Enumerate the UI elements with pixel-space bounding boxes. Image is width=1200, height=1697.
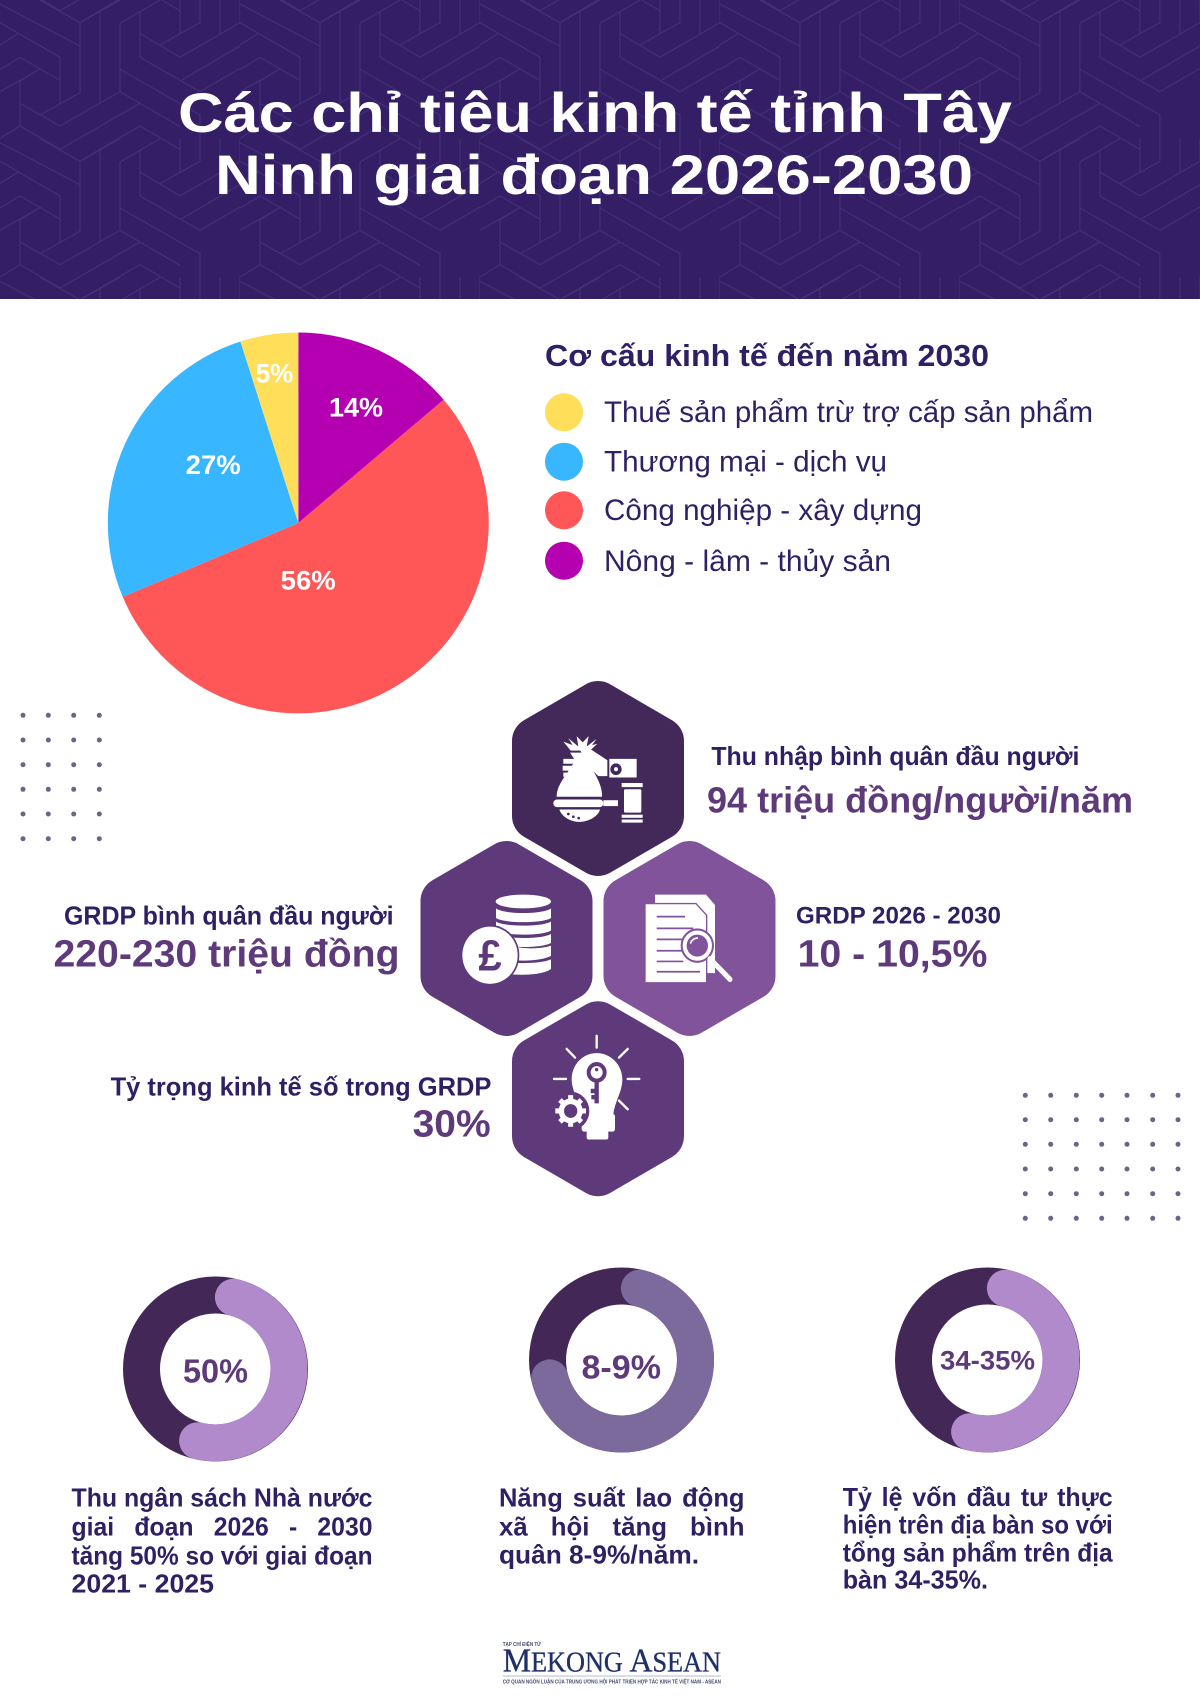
metric: GRDP growth: GRDP 2026 - 2030	[796, 902, 1001, 929]
logo: Mekong Asean: TẠP CHÍ ĐIỆN TỬ	[503, 1640, 542, 1648]
metric: GRDP per capita: GRDP bình quân đầu người	[64, 900, 394, 930]
text block: budget revenue: giai đoạn 2026 - 2030	[72, 1512, 372, 1542]
text block: budget revenue	[72, 1482, 372, 1599]
slice: industry 56%	[123, 400, 489, 713]
slice: agriculture 14%	[298, 332, 444, 523]
text block: budget revenue: tăng 50% so với giai đoạn	[72, 1540, 372, 1570]
legend items: Nông - lâm - thủy sản	[604, 545, 891, 578]
donut: 8-9% labor productivity	[548, 1286, 696, 1434]
title	[178, 81, 1012, 206]
title: Các chỉ tiêu kinh tế tỉnh Tây	[178, 81, 1012, 144]
decorative dots right	[1023, 1093, 1180, 1221]
metric: GRDP per capita	[54, 900, 400, 976]
metric: digital economy share: Tỷ trọng kinh tế số trong GRDP	[111, 1072, 491, 1102]
text block: investment ratio: hiện trên địa bàn so với	[843, 1509, 1113, 1539]
icon: money bag and gavel	[553, 736, 643, 823]
legend items: Thuế sản phẩm trừ trợ cấp sản phẩm	[604, 396, 1093, 429]
pie chart: economic structure	[108, 332, 489, 713]
metric: GRDP growth	[796, 902, 1001, 976]
text block: budget revenue: 2021 - 2025	[72, 1569, 214, 1599]
pie value labels: 27%	[186, 450, 241, 480]
text block: investment ratio: Tỷ lệ vốn đầu tư thực	[843, 1482, 1113, 1512]
text block: labor productivity: xã hội tăng bình	[499, 1512, 744, 1542]
slice: product tax 5%	[240, 332, 298, 523]
text block: investment ratio: tổng sản phẩm trên địa	[843, 1538, 1113, 1568]
text block: investment ratio	[843, 1482, 1113, 1594]
text block: labor productivity: Năng suất lao động	[499, 1482, 744, 1512]
hexagon: income per capita	[536, 705, 660, 852]
hexagon: GRDP 2026-2030	[628, 865, 752, 1012]
title: Ninh giai đoạn 2026-2030	[215, 143, 973, 206]
decorative dots left	[20, 713, 102, 841]
hexagon: digital economy share	[536, 1025, 660, 1172]
logo: Mekong Asean: CƠ QUAN NGÔN LUẬN CỦA TRUNG ƯƠNG HỘI PHÁT TRIỂN HỢP TÁC KINH TẾ VIỆT NAM - ASEAN	[503, 1677, 721, 1685]
legend items: Công nghiệp - xây dựng	[604, 494, 922, 527]
metric: income per capita	[707, 741, 1133, 821]
legend items: Thương mại - dịch vụ	[604, 445, 887, 478]
donut: 50% budget revenue: 50%	[183, 1352, 248, 1389]
pie value labels	[186, 359, 383, 595]
text block: investment ratio: bàn 34-35%.	[843, 1564, 988, 1594]
metric: income per capita: 94 triệu đồng/người/năm	[707, 780, 1133, 821]
legend items	[545, 393, 1093, 580]
pie value labels: 14%	[329, 393, 383, 423]
donut: 34-35% investment ratio: 34-35%	[940, 1345, 1035, 1375]
metric: GRDP growth: 10 - 10,5%	[798, 934, 987, 976]
hexagon: GRDP per capita	[444, 865, 568, 1012]
text block: labor productivity: quân 8-9%/năm.	[499, 1539, 699, 1569]
donut: 34-35% investment ratio	[914, 1286, 1062, 1434]
icon: coins with pound sign	[461, 895, 551, 986]
legend panel	[545, 338, 1093, 580]
metric: digital economy share	[111, 1072, 491, 1146]
pie value labels: 5%	[256, 359, 293, 389]
text block: budget revenue: Thu ngân sách Nhà nước	[72, 1482, 372, 1512]
icon: documents with magnifier	[645, 895, 730, 983]
donut: 50% budget revenue	[142, 1295, 290, 1443]
slice: trade and services 27%	[108, 342, 298, 597]
metric: GRDP per capita: 220-230 triệu đồng	[54, 934, 400, 976]
metric: income per capita: Thu nhập bình quân đầu người	[711, 741, 1079, 771]
metric: digital economy share: 30%	[413, 1104, 491, 1146]
header banner	[0, 0, 1200, 299]
icon: light bulb with key and gear	[552, 1036, 639, 1140]
text block: labor productivity	[499, 1482, 744, 1569]
legend heading: Cơ cấu kinh tế đến năm 2030	[545, 338, 989, 373]
pie value labels: 56%	[281, 565, 336, 595]
donut: 8-9% labor productivity: 8-9%	[582, 1348, 661, 1385]
logo: Mekong Asean: MEKONG ASEAN	[503, 1643, 721, 1680]
icon: coins with pound sign: £	[478, 932, 502, 981]
